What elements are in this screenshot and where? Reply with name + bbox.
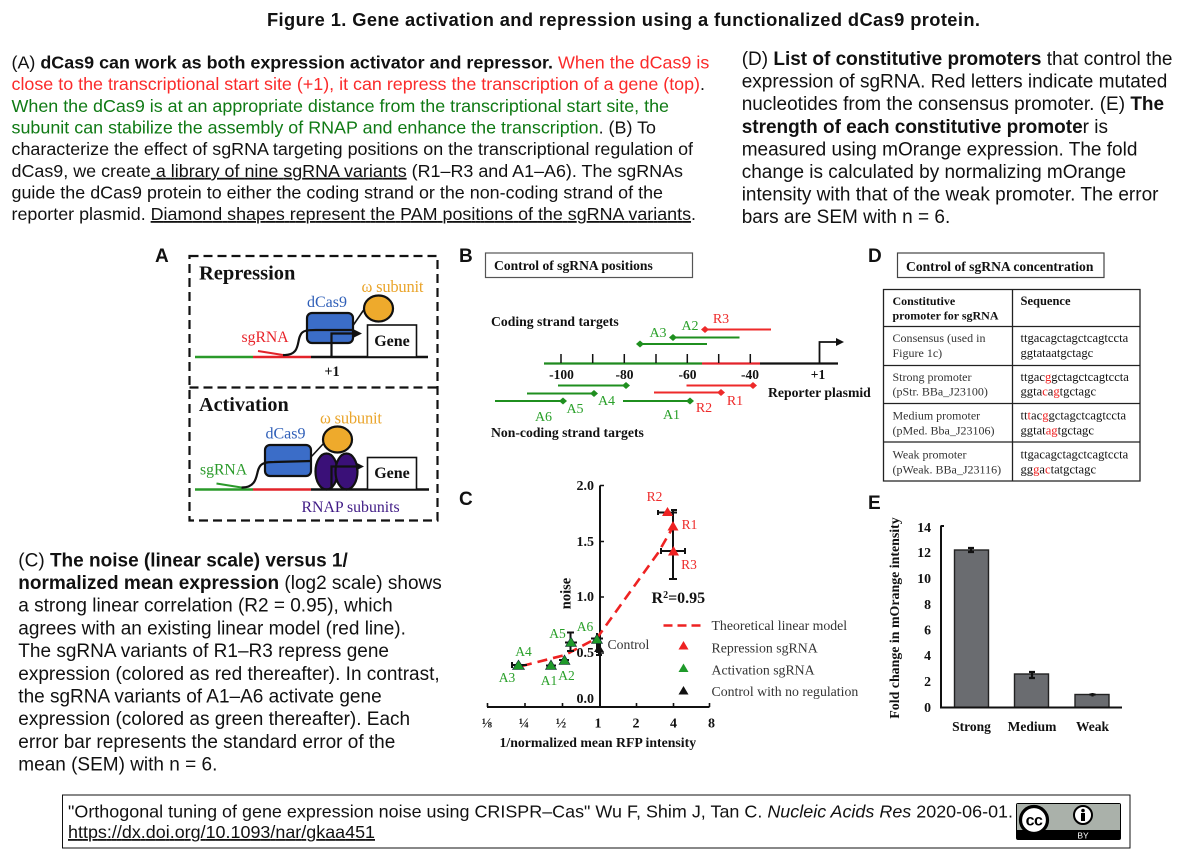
reporter plasmid axis: -60 bbox=[678, 367, 697, 382]
axis labels: 0.0 bbox=[576, 692, 594, 707]
sub-panel: activation: ω subunit bbox=[320, 408, 382, 428]
axis labels: 2.0 bbox=[576, 479, 594, 494]
non-coding strand sgRNA arrows: A4 bbox=[598, 394, 615, 409]
axis labels: 2 bbox=[632, 716, 640, 732]
sub-panel: repression: ω subunit bbox=[362, 277, 424, 296]
point labels: Control bbox=[608, 637, 650, 652]
theoretical linear model line bbox=[522, 527, 673, 666]
dashed frame bbox=[190, 256, 438, 520]
coding strand sgRNA arrows: A2 bbox=[681, 319, 699, 334]
R squared: R bbox=[652, 590, 663, 607]
point labels: A4 bbox=[515, 644, 532, 659]
repression points bbox=[662, 507, 679, 556]
table second column: Sequence bbox=[1020, 294, 1071, 308]
coding strand sgRNA arrows bbox=[636, 312, 771, 348]
axes bbox=[941, 526, 1122, 708]
table second column: ggtacagtgctagc bbox=[1020, 384, 1096, 398]
text block: description of panels A and B bbox=[12, 52, 709, 224]
reporter plasmid axis: -80 bbox=[616, 367, 634, 382]
panel E: fold change bar chart bbox=[868, 493, 1122, 734]
panel C: noise scatter plot bbox=[459, 479, 858, 750]
table first column: (pMed. Bba_J23106) bbox=[892, 424, 994, 438]
panel B: sgRNA positions bbox=[459, 246, 871, 440]
axis labels: ½ bbox=[556, 716, 566, 732]
non-coding strand sgRNA arrows bbox=[495, 382, 757, 425]
citation box bbox=[62, 795, 1130, 848]
table second column: ttgacggctagctcagtccta bbox=[1020, 370, 1129, 384]
axis labels: 6 bbox=[924, 622, 931, 638]
legend: Repression sgRNA bbox=[712, 640, 818, 656]
sub-panel: activation: Activation bbox=[199, 394, 289, 416]
axis labels: ¼ bbox=[519, 716, 529, 732]
text block: description of panels A and B: close to the transcriptional start site (+1), it can repress the transcription of a gene (top). bbox=[12, 74, 705, 94]
text block: description of panels A and B: subunit can stabilize the assembly of RNAP and enhance the transcription. (B) To bbox=[12, 118, 656, 138]
reporter plasmid axis: -40 bbox=[741, 367, 759, 382]
axis labels: 0 bbox=[924, 700, 931, 715]
axis labels: 4 bbox=[670, 716, 677, 732]
point labels: A3 bbox=[499, 670, 515, 685]
sub-panel: activation: sgRNA bbox=[200, 462, 248, 478]
table first column: Constitutive bbox=[892, 294, 956, 308]
text block: description of panel C: (C) The noise (linear scale) versus 1/ bbox=[18, 550, 348, 571]
point labels: A1 bbox=[541, 673, 557, 688]
icon: CC BY licence badge: cc bbox=[1026, 812, 1043, 830]
axis labels: 0.5 bbox=[576, 646, 594, 661]
axis labels: 4 bbox=[924, 648, 931, 663]
axis labels: 1.0 bbox=[576, 590, 594, 605]
R squared: 2 bbox=[663, 590, 668, 601]
table first column: Figure 1c) bbox=[892, 346, 942, 360]
non-coding strand sgRNA arrows: A1 bbox=[663, 408, 680, 423]
point labels: R2 bbox=[647, 489, 662, 504]
reporter plasmid axis: -100 bbox=[549, 367, 574, 382]
non-coding strand sgRNA arrows: A5 bbox=[566, 402, 584, 417]
axis labels bbox=[482, 479, 715, 750]
citation box: https://dx.doi.org/10.1093/nar/gkaa451 bbox=[68, 822, 375, 842]
error bars bbox=[512, 510, 685, 668]
text block: description of panel C: normalized mean expression (log2 scale) shows bbox=[18, 573, 442, 594]
strand labels: Reporter plasmid bbox=[768, 385, 871, 400]
control point bbox=[594, 644, 604, 652]
point labels: A5 bbox=[549, 626, 566, 641]
sub-panel: repression: Repression bbox=[199, 262, 296, 284]
bars bbox=[954, 550, 1109, 708]
heading box: control of sgRNA positions: Control of sgRNA positions bbox=[494, 258, 653, 273]
axis labels: 1/normalized mean RFP intensity bbox=[500, 735, 696, 750]
sub-panel: repression bbox=[195, 262, 428, 380]
text block: description of panels D and E: measured using mOrange expression. The fold bbox=[742, 139, 1137, 160]
icon: CC BY licence badge bbox=[1016, 803, 1121, 840]
text block: description of panels D and E: nucleotides from the consensus promoter. (E) The bbox=[742, 94, 1164, 115]
text block: description of panels D and E: change is calculated by normalizing mOrange bbox=[742, 162, 1126, 183]
sub-panel: repression: sgRNA bbox=[242, 329, 289, 346]
axes bbox=[487, 486, 710, 707]
text block: description of panel C: mean (SEM) with n = 6. bbox=[18, 755, 217, 776]
table first column: (pStr. BBa_J23100) bbox=[892, 384, 988, 398]
sub-panel: activation bbox=[195, 394, 429, 516]
sub-panel: repression: Gene bbox=[374, 333, 410, 350]
axis labels: 1.5 bbox=[576, 535, 594, 550]
heading box: control of sgRNA concentration bbox=[898, 253, 1104, 278]
coding strand sgRNA arrows: A3 bbox=[649, 326, 667, 341]
heading box: control of sgRNA concentration: Control of sgRNA concentration bbox=[906, 259, 1094, 274]
axis labels: Weak bbox=[1076, 719, 1109, 734]
table second column: ggtataatgctagc bbox=[1020, 346, 1094, 360]
table grid bbox=[884, 290, 1140, 481]
panel letter A: A bbox=[155, 246, 169, 267]
text block: description of panel C: a strong linear correlation (R2 = 0.95), which bbox=[18, 596, 393, 617]
axis labels: 10 bbox=[917, 571, 931, 586]
text block: description of panel C: the sgRNA variants of A1–A6 activate gene bbox=[18, 686, 382, 708]
panel letter B: B bbox=[459, 246, 473, 267]
text block: description of panels D and E bbox=[742, 49, 1172, 228]
text block: description of panel C: error bar represents the standard error of the bbox=[18, 732, 395, 753]
text block: description of panels D and E: strength of each constitutive promoter is bbox=[742, 117, 1108, 138]
panel letter C: C bbox=[459, 489, 473, 510]
title: Figure 1. Gene activation and repression using a functionalized dCas9 protein. bbox=[267, 9, 980, 30]
text block: description of panels A and B: dCas9, we create a library of nine sgRNA variants (R1–R3 and A1–A6). The sgRNAs bbox=[12, 161, 683, 181]
table first column bbox=[892, 294, 1001, 476]
table first column: Medium promoter bbox=[892, 408, 980, 422]
table second column: ttgacagctagctcagtccta bbox=[1020, 448, 1129, 462]
table first column: promoter for sgRNA bbox=[892, 308, 999, 322]
text block: description of panel C: expression (colored as red thereafter). In contrast, bbox=[18, 664, 440, 685]
text block: description of panel C: expression (colored as green thereafter). Each bbox=[18, 709, 410, 730]
non-coding strand sgRNA arrows: A6 bbox=[535, 410, 552, 425]
sub-panel: activation: RNAP subunits bbox=[302, 499, 400, 516]
axis labels: 1 bbox=[594, 716, 602, 732]
axis labels: Fold change in mOrange intensity bbox=[888, 517, 903, 719]
text block: description of panels D and E: bars are SEM with n = 6. bbox=[742, 207, 950, 228]
legend: Control with no regulation bbox=[712, 684, 858, 699]
non-coding strand sgRNA arrows: R1 bbox=[727, 394, 743, 409]
panel letter D: D bbox=[868, 246, 882, 267]
axis labels: ⅛ bbox=[482, 716, 493, 732]
axis labels: 14 bbox=[917, 520, 931, 535]
axis labels bbox=[888, 517, 1109, 734]
strand labels: Non-coding strand targets bbox=[491, 425, 644, 440]
point labels: A6 bbox=[577, 619, 593, 634]
text block: description of panels A and B: (A) dCas9 can work as both expression activator and repressor. When the dCas9 is bbox=[12, 52, 709, 72]
table second column: gggactatgctagc bbox=[1020, 462, 1096, 476]
reporter plasmid axis bbox=[544, 338, 844, 382]
axis labels: Medium bbox=[1008, 719, 1057, 734]
text block: description of panels A and B: characterize the effect of sgRNA targeting positions on the transcriptional regulation of bbox=[12, 139, 693, 159]
table second column: ggtatagtgctagc bbox=[1020, 424, 1094, 438]
table first column: Strong promoter bbox=[892, 370, 972, 384]
text block: description of panel C bbox=[18, 550, 442, 776]
coding strand sgRNA arrows: R3 bbox=[713, 312, 729, 327]
sub-panel: activation: dCas9 bbox=[266, 426, 306, 442]
point labels: A2 bbox=[558, 668, 575, 683]
activation points bbox=[512, 634, 602, 670]
citation box: "Orthogonal tuning of gene expression noise using CRISPR–Cas" Wu F, Shim J, Tan C. Nucleic Acids Res 2020-06-01. bbox=[68, 802, 1013, 822]
strand labels bbox=[491, 314, 871, 440]
legend: Theoretical linear model bbox=[712, 618, 847, 633]
table first column: Consensus (used in bbox=[892, 331, 986, 345]
table second column: tttacggctagctcagtccta bbox=[1020, 408, 1126, 422]
axis labels: noise bbox=[558, 577, 574, 609]
axis labels: 8 bbox=[924, 597, 931, 612]
icon: CC BY licence badge: BY bbox=[1077, 830, 1089, 840]
text block: description of panels A and B: When the dCas9 is at an appropriate distance from the transcriptional start site, the bbox=[12, 96, 669, 116]
non-coding strand sgRNA arrows: R2 bbox=[696, 401, 712, 416]
point labels: R1 bbox=[682, 517, 697, 532]
heading box: control of sgRNA positions bbox=[486, 253, 692, 278]
text block: description of panels A and B: guide the dCas9 protein to either the coding strand or the non-coding strand of the bbox=[12, 182, 663, 202]
strand labels: Coding strand targets bbox=[491, 314, 619, 329]
legend bbox=[664, 618, 858, 699]
panel D: promoter table bbox=[868, 246, 1140, 481]
axis labels: 2 bbox=[924, 674, 931, 689]
legend: Activation sgRNA bbox=[712, 662, 815, 678]
table first column: Weak promoter bbox=[892, 448, 967, 462]
point labels bbox=[499, 489, 697, 688]
axis labels: 8 bbox=[708, 716, 715, 732]
text block: description of panels D and E: intensity with that of the weak promoter. The error bbox=[742, 185, 1159, 206]
text block: description of panel C: The sgRNA variants of R1–R3 repress gene bbox=[18, 641, 389, 662]
text block: description of panels D and E: expression of sgRNA. Red letters indicate mutated bbox=[742, 72, 1167, 93]
panel letter E: E bbox=[868, 493, 881, 514]
error bars bbox=[968, 548, 1096, 696]
sub-panel: repression: +1 bbox=[324, 364, 340, 380]
text block: description of panel C: agrees with an existing linear model (red line). bbox=[18, 618, 406, 639]
text block: description of panels D and E: (D) List of constitutive promoters that control the bbox=[742, 49, 1172, 70]
reporter plasmid axis: +1 bbox=[811, 367, 825, 382]
axis labels: Strong bbox=[952, 719, 991, 734]
sub-panel: repression: dCas9 bbox=[307, 294, 347, 311]
sub-panel: activation: Gene bbox=[374, 465, 410, 482]
panel A: repression and activation schematic bbox=[155, 246, 438, 520]
table first column: (pWeak. BBa_J23116) bbox=[892, 462, 1001, 476]
axis labels: 12 bbox=[917, 545, 931, 560]
table second column bbox=[1020, 294, 1129, 476]
text block: description of panels A and B: reporter plasmid. Diamond shapes represent the PAM positions of the sgRNA variants. bbox=[12, 204, 696, 224]
point labels: R3 bbox=[681, 557, 697, 572]
R squared: =0.95 bbox=[668, 590, 705, 607]
table second column: ttgacagctagctcagtccta bbox=[1020, 331, 1129, 345]
